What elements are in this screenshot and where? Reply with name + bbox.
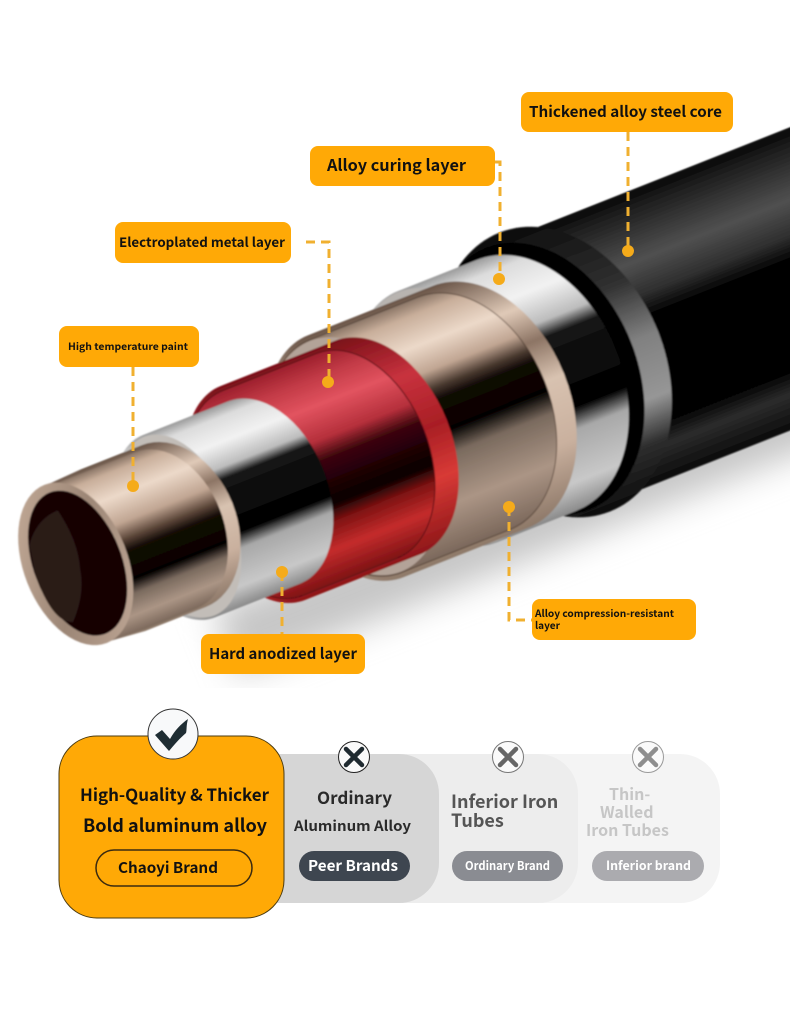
red electroplated layer: [155, 313, 489, 626]
heading: thin-walled iron tubes: Walled: [600, 799, 654, 823]
black steel core: [390, 69, 790, 555]
panel: high-quality chaoyi brand: [59, 709, 284, 918]
callout: High temperature paint: [59, 326, 199, 492]
callout: Hard anodized layer: Hard anodized layer: [209, 643, 357, 664]
badge: chaoyi brand: Chaoyi Brand: [118, 857, 218, 878]
subheading: aluminum alloy: Aluminum Alloy: [293, 816, 411, 836]
badge: inferior brand: Inferior brand: [606, 855, 691, 874]
callout: Thickened alloy steel core: Thickened alloy steel core: [529, 101, 722, 122]
bronze compression layer: [232, 253, 612, 607]
heading: thin-walled iron tubes: Thin-: [609, 781, 650, 805]
icon: light cross: [632, 742, 664, 772]
layered tube illustration: [0, 69, 790, 721]
callout: Alloy curing layer: Alloy curing layer: [326, 152, 466, 176]
callout: High temperature paint: High temperature paint: [68, 338, 189, 353]
callout: Hard anodized layer: [201, 566, 365, 674]
heading: inferior iron tubes: Inferior Iron: [451, 788, 558, 814]
badge: peer brands: Peer Brands: [308, 855, 398, 876]
heading: ordinary: Ordinary: [317, 784, 392, 809]
icon: gray cross: [492, 742, 524, 772]
icon: dark cross: [338, 742, 370, 772]
badge: chaoyi brand: [96, 850, 252, 886]
callout: Electroplated metal layer: [115, 222, 334, 388]
panel: ordinary aluminum alloy: [270, 742, 439, 903]
panel: thin-walled iron tubes: [500, 742, 720, 903]
heading: thin-walled iron tubes: Iron Tubes: [586, 817, 669, 841]
badge: inferior brand: [592, 851, 704, 881]
icon: check mark: [148, 709, 198, 759]
callout: Alloy curing layer: [310, 146, 505, 285]
badge: ordinary brand: [452, 851, 563, 881]
callout: Thickened alloy steel core: [521, 92, 733, 257]
callout: Alloy compression-resistant layer: [503, 501, 696, 640]
tube shadow: [203, 430, 790, 684]
callout: Alloy compression-resistant layer: Alloy compression-resistant: [534, 605, 675, 620]
silver anodized layer: [87, 378, 359, 639]
silver curing layer: [315, 224, 666, 575]
bronze front tube: [0, 422, 264, 665]
subheading: bold aluminum alloy: Bold aluminum alloy: [83, 812, 268, 838]
badge: peer brands: [299, 851, 410, 881]
badge: ordinary brand: Ordinary Brand: [465, 857, 550, 874]
heading: high-quality and thicker: High-Quality & Thicker: [80, 781, 270, 806]
callout: Alloy compression-resistant layer: layer: [535, 617, 561, 632]
heading: inferior iron tubes: Tubes: [451, 807, 504, 833]
panel: inferior iron tubes: [400, 742, 578, 903]
callout: Electroplated metal layer: Electroplated metal layer: [119, 232, 285, 251]
